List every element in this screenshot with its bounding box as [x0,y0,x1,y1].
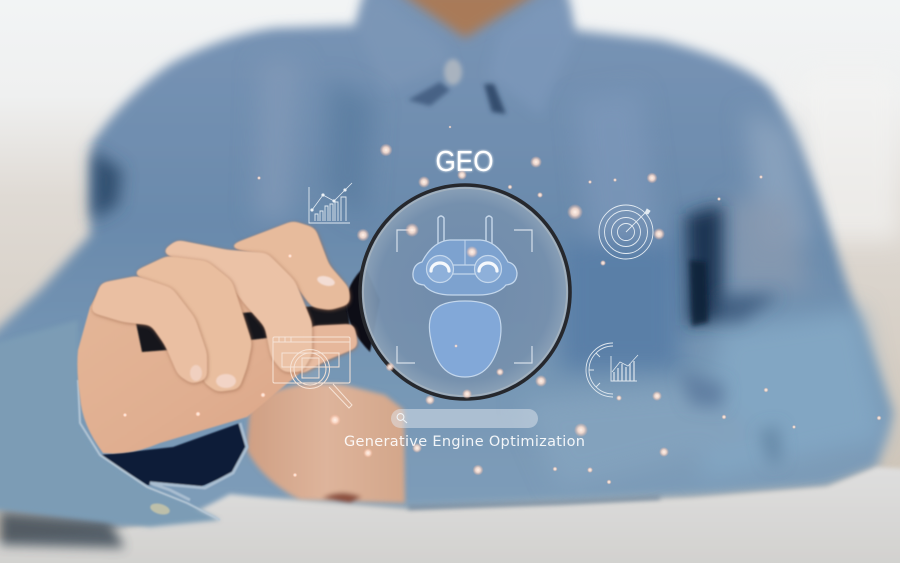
other forearm behind [247,384,405,503]
icon: gauge and chart [586,343,638,397]
head [413,240,517,295]
shirt: folds and shadows [255,60,885,490]
robot icon [397,216,532,377]
magnifier handle [136,303,350,352]
ring finger [131,256,252,392]
antennas [438,216,492,245]
icon: search glass [397,414,407,423]
index finger [225,221,350,310]
sparkle particles [122,126,882,484]
icon: line and bar chart [309,183,352,223]
handle collar [346,266,380,352]
left cuff [78,380,247,520]
collar [358,0,574,115]
lens [360,185,570,399]
table [0,467,900,563]
icon: browser window with magnifier [273,337,352,408]
left sleeve [0,320,220,527]
title GEO: GEO [436,146,494,178]
search bar [391,409,538,428]
subtitle: Generative Engine Optimization [344,434,585,450]
palm and thumb [77,270,355,454]
hand holding magnifier [77,221,380,454]
rim [360,185,570,399]
shadow under shirt hem [408,498,660,508]
nails [190,274,336,388]
table shadow under cuff [0,512,125,548]
middle finger [161,240,312,372]
neck [396,0,542,38]
visor band [450,265,480,274]
eyes [426,256,454,282]
icon: target [599,205,653,259]
focus corners [397,230,532,363]
collar button and shadows [408,59,506,114]
body [429,301,501,377]
pinky finger [90,276,207,384]
magnifying glass [360,185,570,399]
thumb front [290,324,358,375]
